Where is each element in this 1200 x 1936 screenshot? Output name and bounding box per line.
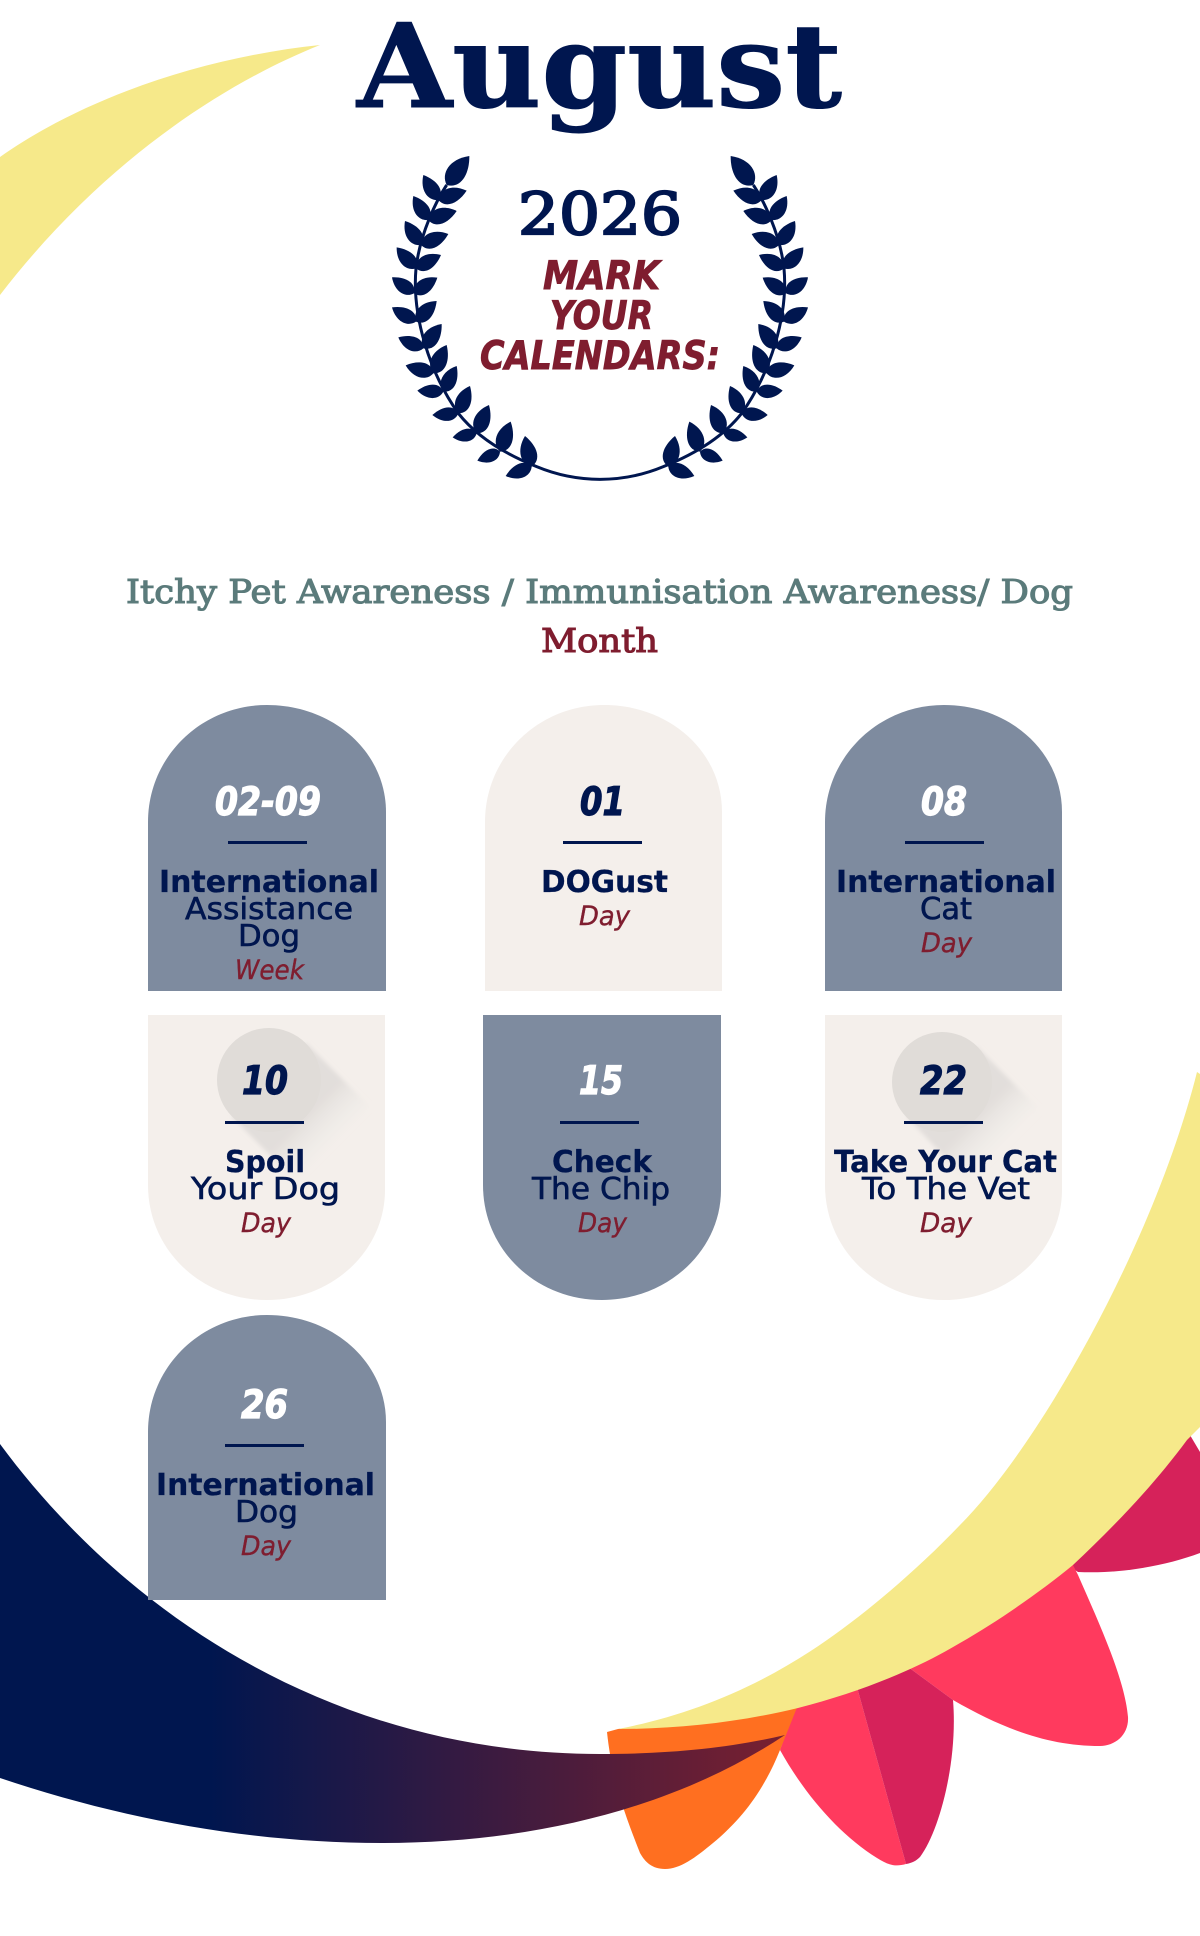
card: 10 Spoil Your Dog Day: 10	[242, 1059, 288, 1104]
card: 15 Check The Chip Day: The Chip	[531, 1172, 670, 1207]
left branch	[388, 150, 600, 483]
card: 15 Check The Chip Day	[483, 1015, 721, 1300]
card: 01 DOGust Day: Day	[579, 901, 631, 932]
card: 26 International Dog Day	[148, 1315, 386, 1600]
card: 08 International Cat Day: 08	[921, 780, 967, 825]
top-right dark petal	[1060, 1430, 1200, 1572]
date badge with long shadow	[217, 1028, 370, 1181]
mark your calendars heading: MARK	[543, 254, 663, 299]
card: 15 Check The Chip Day: 15	[579, 1059, 623, 1104]
title: August	[356, 0, 842, 135]
mark your calendars heading: CALENDARS:	[480, 334, 720, 379]
bottom navy crescent	[0, 1444, 785, 1843]
middle petal	[780, 1661, 954, 1865]
year: 2026	[518, 180, 682, 248]
right pink petal	[900, 1550, 1128, 1746]
card: 08 International Cat Day: Day	[921, 928, 973, 959]
card: 22 Take Your Cat To The Vet Day: To The Vet	[861, 1172, 1030, 1207]
card: 01 DOGust Day: DOGust	[541, 865, 668, 900]
card: 26 International Dog Day: International	[156, 1468, 375, 1503]
card: 02-09 International Assistance Dog Week: Dog	[238, 919, 300, 954]
top-left yellow crescent	[0, 45, 320, 295]
card: 10 Spoil Your Dog Day: Day	[241, 1208, 292, 1239]
right branch	[600, 150, 812, 483]
awareness subtitle: Itchy Pet Awareness / Immunisation Awareness/ Dog	[126, 572, 1073, 611]
card: 26 International Dog Day: Day	[241, 1531, 292, 1562]
date badge with long shadow	[892, 1032, 1040, 1182]
card: 10 Spoil Your Dog Day: Spoil	[225, 1145, 305, 1180]
card: 22 Take Your Cat To The Vet Day: Day	[920, 1208, 973, 1239]
awareness subtitle: Month	[541, 621, 658, 660]
mark your calendars heading	[480, 254, 720, 379]
card: 22 Take Your Cat To The Vet Day: Take Your Cat	[834, 1145, 1057, 1180]
card: 15 Check The Chip Day: Check	[552, 1145, 653, 1180]
card: 26 International Dog Day: 26	[241, 1383, 288, 1428]
card: 02-09 International Assistance Dog Week: International	[159, 865, 379, 900]
card: 02-09 International Assistance Dog Week	[148, 705, 386, 991]
card: 10 Spoil Your Dog Day: Your Dog	[190, 1172, 340, 1207]
card: 08 International Cat Day	[825, 705, 1062, 991]
card: 02-09 International Assistance Dog Week: Assistance	[185, 892, 353, 927]
card: 02-09 International Assistance Dog Week: 02-09	[215, 780, 321, 825]
card: 26 International Dog Day: Dog	[235, 1495, 298, 1530]
large yellow crescent	[618, 1072, 1200, 1729]
card: 22 Take Your Cat To The Vet Day	[825, 1015, 1062, 1300]
awareness subtitle	[126, 572, 1073, 660]
mark your calendars heading: YOUR	[550, 294, 653, 339]
card: 08 International Cat Day: International	[836, 865, 1056, 900]
card: 01 DOGust Day: 01	[580, 780, 625, 825]
card: 15 Check The Chip Day: Day	[578, 1208, 628, 1239]
card: 08 International Cat Day: Cat	[920, 892, 972, 927]
card: 10 Spoil Your Dog Day	[148, 1015, 385, 1300]
card: 02-09 International Assistance Dog Week: Week	[235, 955, 305, 986]
orange petal	[607, 1705, 798, 1869]
card: 01 DOGust Day	[485, 705, 722, 991]
card: 22 Take Your Cat To The Vet Day: 22	[920, 1059, 967, 1104]
laurel wreath	[388, 150, 812, 483]
